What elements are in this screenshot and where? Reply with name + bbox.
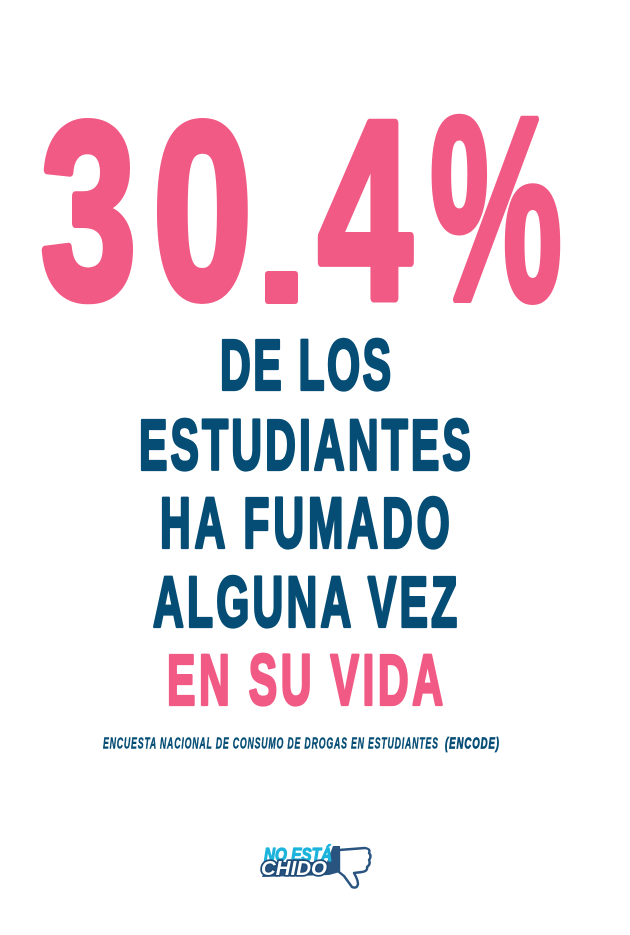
- headline text: ALGUNA VEZ: [153, 563, 457, 642]
- headline text: EN SU VIDA: [167, 641, 443, 720]
- wordmark: CHIDO: [261, 858, 327, 880]
- headline text: ESTUDIANTES: [139, 406, 471, 485]
- icon: navy cuff behind wordmark: [262, 846, 340, 877]
- headline text: HA FUMADO: [160, 484, 450, 563]
- icon: thumbs down hand: [339, 848, 370, 888]
- source note: ENCUESTA NACIONAL DE CONSUMO DE DROGAS EN ESTUDIANTES: [103, 734, 438, 752]
- big statistic: 30.4%: [41, 63, 562, 356]
- wordmark: NO ESTÁ: [264, 844, 332, 865]
- big statistic: 30.4%: 4: [318, 68, 412, 352]
- headline text: DE LOS: [220, 326, 391, 405]
- wordmark: [261, 844, 332, 880]
- big statistic: 30.4%: 3: [41, 72, 136, 351]
- logo: No está chido with thumbs down: [261, 844, 370, 888]
- headline text: [139, 326, 471, 720]
- big statistic: 30.4%: %: [430, 63, 562, 356]
- big statistic: 30.4%: 0: [153, 71, 252, 350]
- source note: (ENCODE): [445, 734, 499, 752]
